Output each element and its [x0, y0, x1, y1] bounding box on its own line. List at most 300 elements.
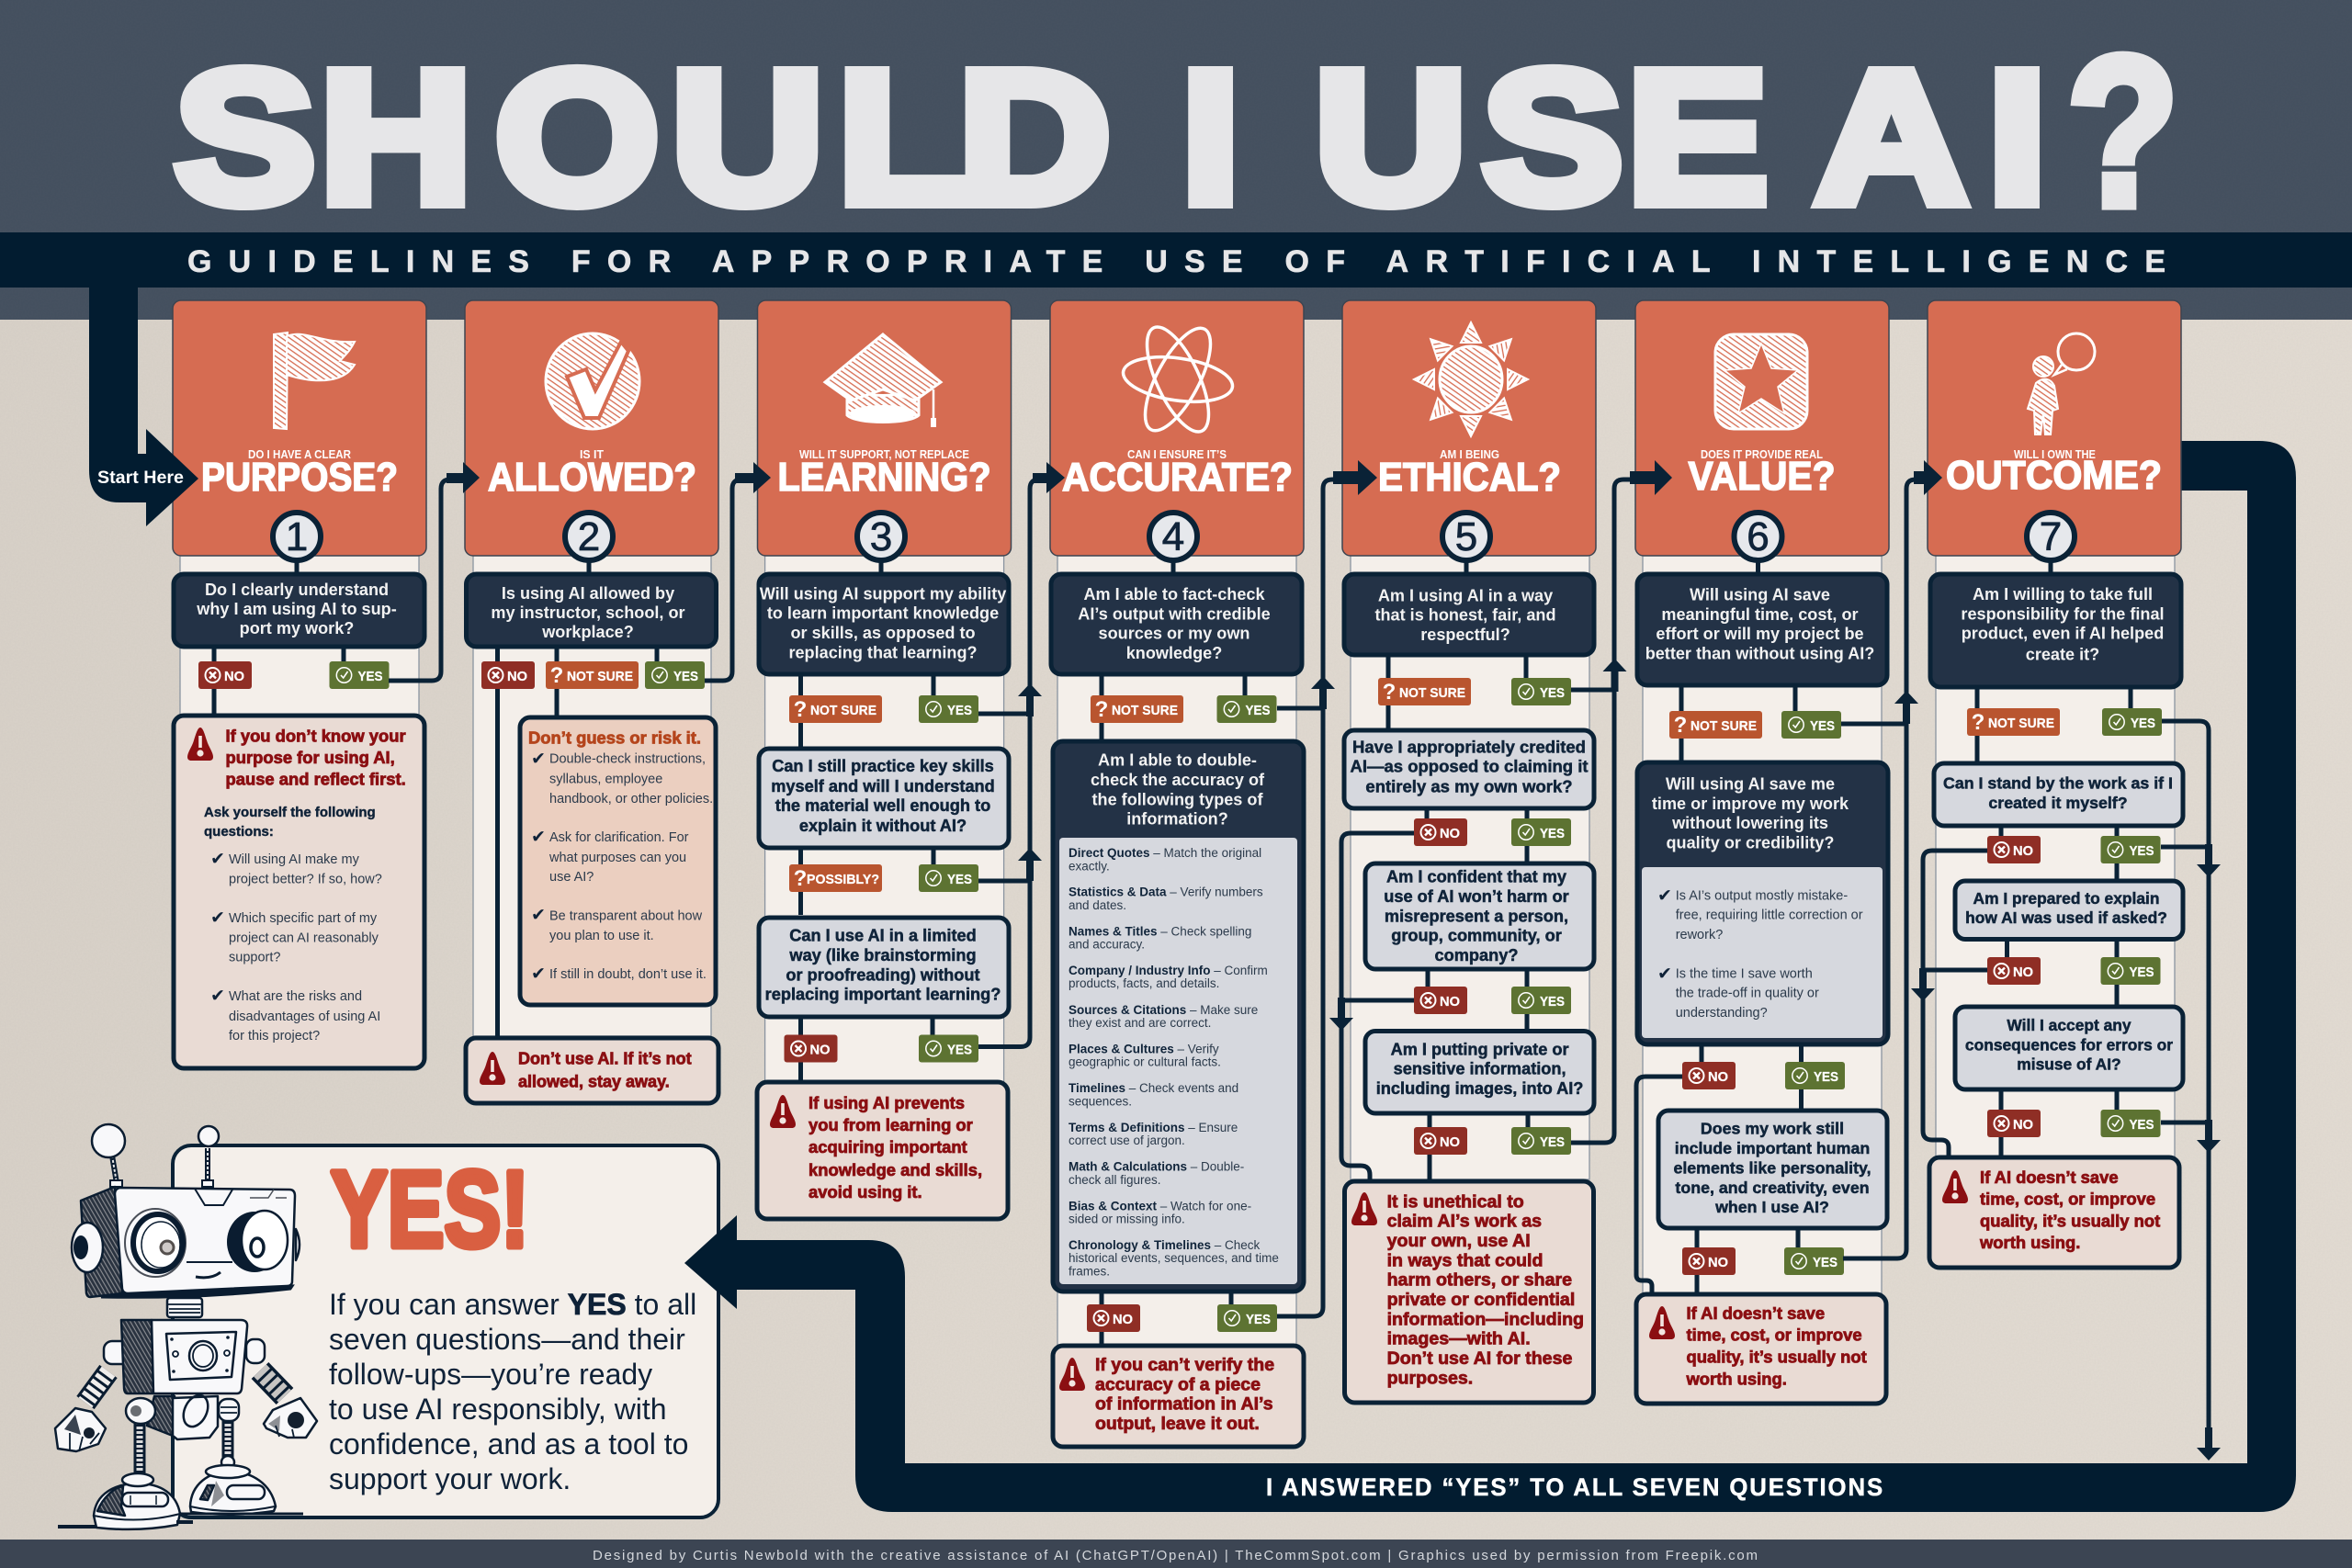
badge yes: YES [1814, 1069, 1838, 1085]
callout: do not guess: use AI? [549, 870, 594, 885]
conclusion text: seven questions—and their [329, 1323, 685, 1356]
question 3: to learn important knowledge [767, 604, 999, 623]
question 3: or skills, as opposed to [790, 624, 976, 642]
callout: purpose warning: questions: [204, 824, 274, 840]
question 1: why I am using AI to sup- [196, 600, 397, 618]
title: SHOULD I USE AI [175, 32, 2047, 243]
callout: purpose warning: ✔ [210, 908, 225, 928]
panel: column 4 accurate [1050, 300, 1304, 1447]
number 7 [2027, 513, 2075, 560]
badge not sure: ? [1095, 697, 1108, 722]
callout: ethics warning: It is unethical to [1387, 1192, 1524, 1213]
badge no [1987, 1110, 2041, 1137]
question 6: meaningful time, cost, or [1661, 605, 1859, 624]
badge yes: YES [1540, 994, 1565, 1010]
badge yes: YES [947, 1042, 972, 1058]
badge possibly: POSSIBLY? [807, 872, 879, 887]
card: allowed: IS IT [580, 447, 604, 461]
question 7: Am I willing to take full [1973, 585, 2153, 604]
follow-up: accept consequences: Will I accept any [2007, 1016, 2132, 1034]
card: ethical: AM I BEING [1440, 447, 1499, 461]
badge no [1414, 1127, 1467, 1155]
footer bar: Designed by Curtis Newbold with the creative assistance of AI (ChatGPT/OpenAI) | TheCommSpot.com | Graphics used by permission from Freepik.com [593, 1548, 1758, 1563]
verification list: Terms & Definitions – Ensure [1069, 1121, 1238, 1134]
callout: ethics warning: in ways that could [1387, 1251, 1543, 1271]
follow-up: credited: entirely as my own work? [1365, 777, 1573, 795]
robot feet [58, 1465, 303, 1529]
follow-up: explain use: Am I prepared to explain [1973, 889, 2159, 908]
verification list: Direct Quotes – Match the original [1069, 846, 1261, 860]
icon: star badge [1715, 334, 1807, 429]
follow-up: human elements: when I use AI? [1714, 1198, 1829, 1216]
question 3: replacing that learning? [788, 643, 978, 661]
badge yes: YES [1246, 703, 1270, 718]
follow-up: accept consequences: misuse of AI? [2017, 1055, 2121, 1073]
arrow to card 2 [447, 462, 480, 493]
verification list: correct use of jargon. [1069, 1134, 1185, 1147]
callout: purpose warning: for this project? [229, 1029, 320, 1043]
verification list: check all figures. [1069, 1173, 1161, 1187]
verification list: frames. [1069, 1264, 1110, 1278]
badge no: NO [2013, 1117, 2033, 1133]
callout: do not guess: you plan to use it. [549, 929, 654, 943]
question 5: Am I using AI in a way [1378, 586, 1553, 604]
badge no: NO [1708, 1069, 1728, 1085]
icon: sun [1414, 322, 1528, 436]
number 1: 1 [286, 514, 308, 559]
callout: value warning [1636, 1294, 1886, 1404]
verification list: Chronology & Timelines – Check [1069, 1238, 1260, 1252]
follow-up: credited: AI—as opposed to claiming it [1350, 757, 1589, 775]
verification list: Statistics & Data – Verify numbers [1069, 886, 1263, 899]
checklist box [1053, 741, 1304, 1292]
badge yes: YES [673, 669, 698, 684]
badge no: NO [2013, 843, 2033, 859]
question 4: AI’s output with credible [1078, 604, 1271, 623]
callout: accuracy warning [1053, 1346, 1304, 1447]
follow-up: accept consequences [1955, 1007, 2183, 1089]
callout: value warning: If AI doesn’t save [1687, 1303, 1825, 1323]
verification list: Timelines – Check events and [1069, 1081, 1238, 1095]
follow-up: human elements [1658, 1111, 1887, 1228]
card: learning: WILL IT SUPPORT, NOT REPLACE [799, 447, 969, 461]
icon: check circle [546, 333, 639, 429]
subtitle ribbon [0, 232, 2352, 288]
badge yes [1511, 818, 1571, 846]
number 2 [565, 513, 613, 560]
callout: purpose warning: support? [229, 950, 280, 964]
follow-up: save time box: time or improve my work [1652, 795, 1849, 813]
question 4: Am I able to fact-check [1083, 585, 1265, 604]
follow-up: save time box: without lowering its [1671, 814, 1828, 832]
badge no [1414, 818, 1467, 846]
follow-up: practice skills: myself and will I understand [771, 777, 995, 795]
callout: learning warning [757, 1082, 1008, 1219]
verification list: Bias & Context – Watch for one- [1069, 1199, 1251, 1213]
follow-up: human elements: tone, and creativity, even [1675, 1179, 1870, 1197]
callout: purpose warning: Ask yourself the following [204, 805, 376, 820]
badge yes [1217, 1304, 1277, 1332]
badge yes [2100, 836, 2161, 863]
question 6 [1637, 574, 1887, 685]
start here arrow: Start Here [97, 468, 184, 488]
follow-up: private information: sensitive information, [1394, 1060, 1566, 1078]
badge not sure [1669, 711, 1762, 739]
question 5: respectful? [1420, 626, 1510, 644]
subtitle ribbon: GUIDELINES FOR APPROPRIATE USE OF ARTIFICIAL INTELLIGENCE [187, 244, 2165, 279]
number 3 [857, 513, 905, 560]
badge no: NO [1440, 1134, 1460, 1150]
follow-up: stand by the work [1934, 763, 2183, 826]
badge not sure: NOT SURE [1399, 685, 1465, 701]
question 4: sources or my own [1099, 625, 1250, 643]
badge yes [1781, 711, 1841, 739]
callout: do not guess: Ask for clarification. For [549, 830, 689, 845]
follow-up: no harm: company? [1435, 946, 1518, 964]
checklist box: Am I able to double- [1098, 751, 1257, 770]
number 7: 7 [2040, 514, 2062, 559]
badge no: NO [1440, 994, 1460, 1010]
robot illustration [55, 1124, 317, 1529]
question 6: Will using AI save [1690, 586, 1830, 604]
verification list: and dates. [1069, 898, 1126, 912]
badge yes: YES [947, 703, 972, 718]
badge yes: YES [2131, 716, 2155, 731]
badge not sure: NOT SURE [1988, 716, 2054, 731]
panel: column 1 purpose [173, 300, 426, 1068]
arrow to card 3 [735, 462, 771, 493]
callout: purpose warning: purpose for using AI, [226, 748, 395, 767]
conclusion text: support your work. [329, 1462, 571, 1495]
badge not sure [546, 661, 639, 689]
verification list: historical events, sequences, and time [1069, 1251, 1279, 1265]
badge yes [2100, 957, 2161, 985]
number 1 [273, 513, 321, 560]
panel: yes conclusion [173, 1145, 718, 1517]
follow-up: limited way: replacing important learning? [765, 985, 1001, 1003]
checklist: ✔ [1657, 964, 1672, 984]
callout: accuracy warning: If you can’t verify the [1095, 1355, 1274, 1375]
callout: do not guess [520, 717, 716, 1005]
callout: accuracy warning: of information in AI’s [1095, 1394, 1273, 1415]
callout: ethics warning: private or confidential [1387, 1290, 1575, 1310]
badge not sure: ? [1972, 710, 1984, 735]
badge no: NO [810, 1042, 831, 1058]
badge possibly: ? [794, 866, 807, 891]
badge yes [1511, 678, 1571, 705]
callout: purpose warning: ✔ [210, 849, 225, 869]
question 3 [759, 574, 1009, 674]
checklist: Is the time I save worth [1676, 966, 1813, 981]
badge not sure: ? [1674, 713, 1687, 738]
follow-up: limited way: way (like brainstorming [788, 946, 977, 964]
callout: do not guess: handbook, or other policies. [549, 792, 713, 807]
badge yes [1785, 1062, 1845, 1089]
question 1: port my work? [240, 619, 354, 637]
badge not sure [1967, 708, 2060, 736]
callout: accuracy warning: output, leave it out. [1095, 1414, 1260, 1434]
title: ? [2067, 13, 2178, 250]
icon: graduation cap [825, 334, 941, 427]
callout: ethics warning: information—including [1387, 1310, 1584, 1330]
verification list: Places & Cultures – Verify [1069, 1042, 1219, 1056]
conclusion text: follow-ups—you’re ready [329, 1358, 652, 1391]
follow-up: practice skills [759, 749, 1009, 848]
callout: do not guess: Double-check instructions, [549, 751, 706, 766]
badge yes: YES [1540, 685, 1565, 701]
question 1 [174, 574, 424, 647]
checklist: ✔ [1657, 886, 1672, 906]
start here arrow [89, 288, 198, 526]
badge no [1682, 1247, 1736, 1275]
badge not sure [1091, 695, 1183, 723]
arrow to card 7 [1914, 460, 1942, 495]
checklist: free, requiring little correction or [1676, 908, 1863, 923]
card: ethical [1342, 300, 1596, 556]
panel: column 6 value [1635, 300, 1889, 1404]
callout: ethics warning [1345, 1181, 1593, 1403]
follow-up: no harm [1365, 863, 1594, 969]
follow-up: explain use: how AI was used if asked? [1965, 908, 2167, 927]
follow-up: private information: including images, into AI? [1376, 1079, 1583, 1098]
badge yes [919, 864, 978, 892]
verification list: Math & Calculations – Double- [1069, 1160, 1244, 1174]
follow-up: stand by the work: created it myself? [1988, 794, 2128, 812]
callout: purpose warning: ✔ [210, 986, 225, 1006]
checklist box: information? [1126, 810, 1228, 829]
callout: do not guess: ✔ [531, 749, 546, 769]
number 6: 6 [1747, 514, 1770, 559]
number 3: 3 [870, 514, 892, 559]
badge not sure: NOT SURE [1112, 703, 1178, 718]
callout: do not use [466, 1038, 718, 1103]
badge possibly [789, 864, 882, 892]
question 2 [467, 574, 717, 647]
robot neck [167, 1298, 202, 1317]
follow-up: private information [1365, 1031, 1594, 1113]
number 4 [1149, 513, 1197, 560]
verification list: Company / Industry Info – Confirm [1069, 964, 1268, 977]
follow-up: save time box: Will using AI save me [1666, 775, 1835, 794]
badge yes [919, 695, 978, 723]
number 5: 5 [1455, 514, 1477, 559]
conclusion text: to use AI responsibly, with [329, 1393, 667, 1426]
footer bar [0, 1540, 2352, 1568]
card: purpose [173, 300, 426, 556]
callout: purpose warning: If you don’t know your [226, 726, 406, 746]
question 4: knowledge? [1126, 644, 1222, 662]
badge yes: YES [1540, 1134, 1565, 1150]
callout: do not guess: ✔ [531, 964, 546, 984]
badge yes [1784, 1247, 1844, 1275]
follow-up: limited way [759, 918, 1009, 1017]
callout: outcome warning [1929, 1157, 2179, 1268]
panel: column 7 outcome [1928, 300, 2183, 1268]
card: ethical: ETHICAL? [1378, 455, 1561, 500]
callout: ethics warning: claim AI’s work as [1387, 1211, 1542, 1231]
number 2: 2 [578, 514, 600, 559]
return path ribbon: I ANSWERED “YES” TO ALL SEVEN QUESTIONS [1266, 1473, 1884, 1501]
question 2: Is using AI allowed by [502, 584, 674, 603]
card: accurate: ACCURATE? [1062, 455, 1293, 500]
callout: do not use: Don’t use AI. If it’s not [518, 1049, 692, 1067]
icon: flag [274, 333, 355, 429]
follow-up: human elements: include important human [1675, 1139, 1870, 1157]
verification list: sided or missing info. [1069, 1213, 1185, 1225]
callout: purpose warning: project better? If so, how? [229, 873, 382, 887]
number 4: 4 [1162, 514, 1184, 559]
verification list: exactly. [1069, 859, 1110, 873]
callout: purpose warning: disadvantages of using AI [229, 1010, 380, 1024]
badge yes [919, 1034, 978, 1062]
verification list: Names & Titles – Check spelling [1069, 924, 1251, 939]
badge no [481, 661, 535, 689]
question 7 [1930, 574, 2181, 687]
verification list: Sources & Citations – Make sure [1069, 1003, 1258, 1017]
callout: ethics warning: your own, use AI [1387, 1231, 1531, 1251]
badge no [1414, 987, 1467, 1014]
card: learning [757, 300, 1011, 556]
question 5: that is honest, fair, and [1374, 606, 1556, 625]
badge yes [1216, 695, 1277, 723]
card: outcome: WILL I OWN THE [2014, 447, 2096, 461]
checklist box: check the accuracy of [1091, 771, 1265, 789]
question 1: Do I clearly understand [205, 581, 389, 599]
checklist box: the following types of [1092, 790, 1263, 808]
panel: column 2 allowed [465, 300, 718, 1103]
badge yes: YES [1813, 1255, 1838, 1270]
panel: column 5 ethical [1342, 300, 1596, 1403]
robot arms [55, 1371, 317, 1451]
badge yes: YES [1540, 826, 1565, 841]
question 7: responsibility for the final [1961, 604, 2165, 623]
badge no: NO [2013, 964, 2033, 980]
follow-up: human elements: Does my work still [1701, 1119, 1844, 1137]
verification list: products, facts, and details. [1069, 976, 1219, 990]
arrow to card 5 [1333, 460, 1377, 495]
question 3: Will using AI support my ability [760, 584, 1006, 603]
follow-up: credited [1344, 730, 1594, 808]
callout: purpose warning [174, 716, 424, 1068]
callout: do not guess: syllabus, employee [549, 772, 662, 786]
card: accurate: CAN I ENSURE IT’S [1127, 447, 1227, 461]
follow-up: practice skills: Can I still practice key skills [772, 757, 994, 775]
arrow into conclusion [684, 1215, 737, 1309]
callout: do not guess: Be transparent about how [549, 909, 703, 924]
badge not sure [1378, 678, 1471, 705]
callout: purpose warning: Will using AI make my [229, 852, 360, 867]
callout: learning warning: knowledge and skills, [808, 1160, 982, 1179]
callout: purpose warning: Which specific part of my [229, 911, 378, 926]
question 4 [1051, 574, 1302, 674]
badge yes: YES [2130, 964, 2154, 980]
number 6 [1735, 513, 1782, 560]
follow-up: human elements: elements like personality, [1673, 1159, 1871, 1178]
header band [0, 0, 2352, 320]
follow-up: private information: Am I putting private or [1391, 1040, 1569, 1058]
callout: learning warning: acquiring important [808, 1137, 967, 1156]
arrow to card 6 [1630, 460, 1672, 495]
conclusion text: If you can answer YES to all [329, 1288, 696, 1321]
callout: value warning: quality, it’s usually not [1687, 1347, 1867, 1367]
card: value: VALUE? [1689, 454, 1836, 499]
question 6: better than without using AI? [1645, 645, 1874, 663]
callout: ethics warning: Don’t use AI for these [1387, 1348, 1572, 1369]
checklist: understanding? [1676, 1006, 1768, 1021]
badge yes: YES [358, 669, 382, 684]
flow connectors and arrows [389, 460, 2221, 1461]
callout: purpose warning: pause and reflect first. [226, 770, 406, 788]
checklist [1642, 867, 1883, 1038]
callout: ethics warning: purposes. [1387, 1369, 1473, 1389]
robot body [104, 1320, 265, 1393]
callout: outcome warning: If AI doesn’t save [1980, 1168, 2119, 1187]
badge no: NO [1708, 1255, 1728, 1270]
badge no: NO [224, 669, 244, 684]
badge yes: YES [1810, 718, 1835, 734]
card: value: DOES IT PROVIDE REAL [1701, 447, 1823, 461]
follow-up: no harm: group, community, or [1391, 926, 1562, 944]
badge not sure [789, 695, 882, 723]
badge yes: YES [2130, 843, 2154, 859]
follow-up: credited: Have I appropriately credited [1352, 737, 1586, 757]
card: learning: LEARNING? [777, 455, 990, 500]
panel: column 3 learning [757, 300, 1011, 1219]
card: allowed [465, 300, 718, 556]
card: outcome: OUTCOME? [1946, 453, 2162, 498]
follow-up: explain use [1955, 881, 2183, 939]
badge no: NO [507, 669, 527, 684]
badge yes: YES [1246, 1312, 1271, 1327]
follow-up: no harm: misrepresent a person, [1385, 908, 1568, 926]
follow-up: stand by the work: Can I stand by the work as if I [1943, 773, 2173, 792]
badge yes [1511, 1127, 1571, 1155]
callout: purpose warning: What are the risks and [229, 989, 362, 1004]
badge not sure: ? [794, 697, 807, 722]
question 7: product, even if AI helped [1962, 625, 2164, 643]
badge no [785, 1034, 838, 1062]
checklist: Is AI’s output mostly mistake- [1676, 889, 1848, 904]
badge no: NO [1113, 1312, 1133, 1327]
badge yes: YES [2130, 1117, 2154, 1133]
callout: do not guess: ✔ [531, 905, 546, 925]
card: value [1635, 300, 1889, 556]
robot antennae [92, 1124, 219, 1187]
card: allowed: ALLOWED? [488, 455, 696, 500]
follow-up: practice skills: the material well enough to [775, 796, 990, 815]
robot head [72, 1187, 300, 1297]
badge yes: YES [947, 872, 972, 887]
checklist: the trade-off in quality or [1676, 987, 1819, 1001]
badge no [1987, 957, 2041, 985]
question 2: my instructor, school, or [491, 604, 685, 622]
badge no [1682, 1062, 1736, 1089]
badge not sure: NOT SURE [810, 703, 876, 718]
badge not sure: NOT SURE [1690, 718, 1757, 734]
badge no [1987, 836, 2041, 863]
badge not sure: ? [1383, 680, 1396, 705]
checklist: rework? [1676, 928, 1723, 942]
callout: accuracy warning: accuracy of a piece [1095, 1374, 1261, 1394]
callout: do not guess: If still in doubt, don’t use it. [549, 967, 707, 982]
callout: purpose warning: project can AI reasonably [229, 931, 379, 946]
verification list: sequences. [1069, 1094, 1132, 1108]
callout: ethics warning: harm others, or share [1387, 1269, 1572, 1290]
verification list: they exist and are correct. [1069, 1016, 1211, 1030]
badge not sure: NOT SURE [567, 669, 633, 684]
badge no [1087, 1304, 1140, 1332]
follow-up: no harm: use of AI won’t harm or [1384, 887, 1569, 906]
